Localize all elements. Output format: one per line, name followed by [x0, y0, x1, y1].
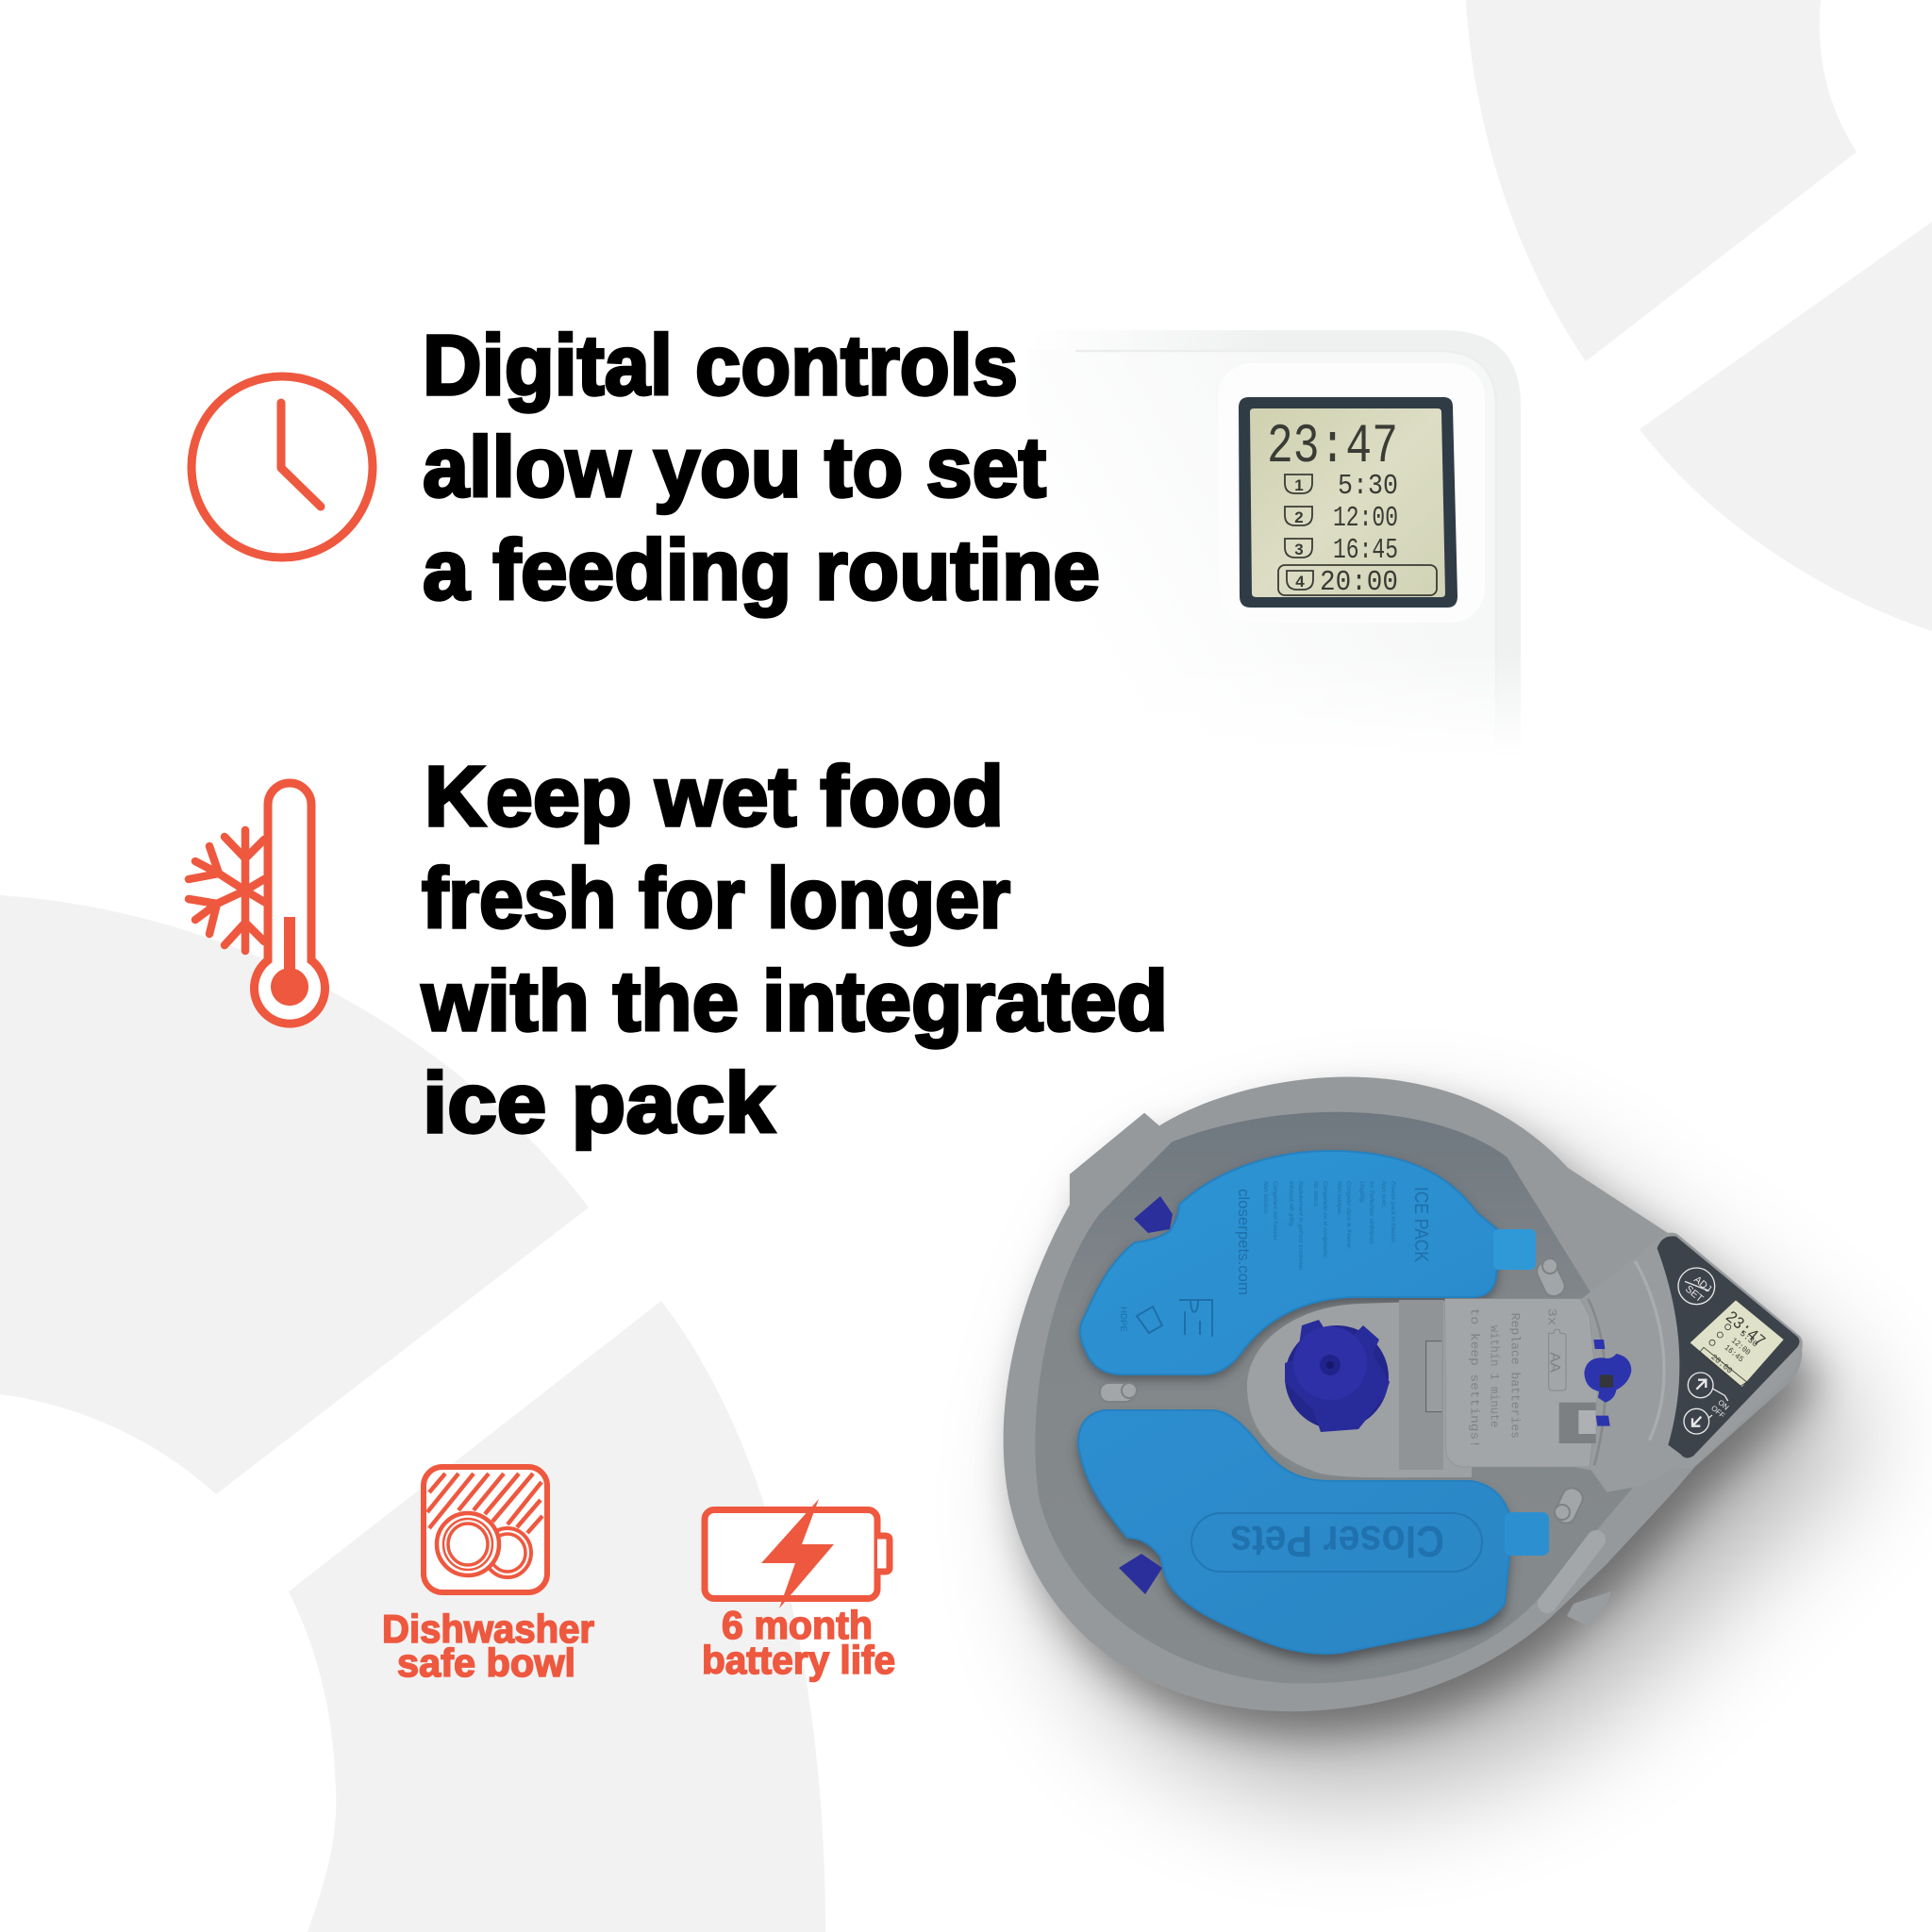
ice pack top: HDPE — [1119, 1307, 1128, 1332]
ice pack top: Congelado en el congelador. — [1322, 1181, 1328, 1259]
label: battery life — [702, 1603, 895, 1682]
label: battery life: battery life — [702, 1638, 895, 1682]
ice pack top: Congelare nel freezer. — [1272, 1181, 1278, 1241]
control panel: SET — [1683, 1283, 1706, 1305]
ice pack top: Nedokument in gefrost trockener. — [1297, 1181, 1304, 1272]
ice pack top: ICE PACK — [1410, 1187, 1431, 1263]
ice pack top: No tóxico. — [1312, 1181, 1319, 1208]
icon: dishwasher — [424, 1467, 547, 1592]
heading: keep wet food: ice pack — [423, 1057, 775, 1151]
indigo clips — [1119, 1196, 1173, 1594]
ice pack shadows — [1078, 1156, 1509, 1661]
LCD display: 4 — [1295, 573, 1305, 591]
LCD display: 16:45 — [1333, 534, 1398, 567]
LCD display: 12:00 — [1333, 502, 1398, 535]
heading: keep wet food: Keep wet food — [425, 750, 1004, 844]
control panel: 5:30 — [1738, 1329, 1759, 1349]
ice pack bottom — [1078, 1410, 1549, 1654]
ice pack top: Ungiftig. — [1358, 1181, 1365, 1204]
LCD display: 20:00 — [1320, 566, 1398, 599]
label: dishwasher safe bowl: safe bowl — [397, 1641, 575, 1685]
ice pack top — [1080, 1151, 1536, 1374]
faded feeder top — [1028, 330, 1528, 757]
ice pack top: Congeler dans le freezer. — [1345, 1181, 1352, 1250]
ice pack top: Non toxique. — [1336, 1181, 1342, 1216]
console and battery door: within 1 minute — [1487, 1325, 1501, 1427]
control panel: ADJ — [1691, 1274, 1713, 1295]
control panel: 12:00 — [1729, 1336, 1752, 1357]
console and battery door — [1426, 1233, 1803, 1492]
heading: keep wet food: fresh for longer — [422, 852, 1010, 946]
ice pack top: closerpets.com — [1235, 1189, 1253, 1295]
side latch — [1547, 1540, 1611, 1627]
feeder body — [1004, 1076, 1802, 1711]
LCD display: 5:30 — [1338, 470, 1398, 503]
console and battery door: Replace batteries — [1507, 1313, 1522, 1439]
hub — [1247, 1300, 1472, 1477]
soft shadow of ice pack feeder — [1018, 1100, 1858, 1787]
LCD display: 23:47 — [1267, 417, 1398, 478]
battery lock — [1584, 1340, 1631, 1426]
console and battery door: 3x — [1544, 1308, 1558, 1325]
label: dishwasher safe bowl — [382, 1607, 594, 1685]
control panel: ON — [1716, 1398, 1731, 1412]
LCD display: 1 — [1294, 476, 1304, 494]
heading: keep wet food — [421, 750, 1168, 1151]
label: battery life: 6 month — [722, 1603, 873, 1647]
ice pack top: Im Tiefkühler einfrieren. — [1368, 1181, 1374, 1245]
icon: battery — [705, 1499, 890, 1608]
heading: digital controls: allow you to set — [423, 421, 1046, 515]
control panel: 23:47 — [1721, 1308, 1768, 1352]
LCD display: 3 — [1294, 541, 1304, 558]
heading: keep wet food: with the integrated — [421, 955, 1168, 1049]
control panel: 16:45 — [1723, 1343, 1745, 1364]
feeding knob — [1285, 1320, 1390, 1432]
control panel: 20:00 — [1708, 1353, 1734, 1375]
ice pack top: Non toxic. — [1380, 1181, 1387, 1208]
ice pack top: Infused nitt giftig. — [1288, 1181, 1294, 1227]
ice pack top: Freeze pack in freezer. — [1390, 1181, 1396, 1243]
label: dishwasher safe bowl: Dishwasher — [382, 1607, 594, 1651]
ice pack bottom: Closer Pets — [1230, 1517, 1444, 1566]
heading: digital controls — [423, 319, 1100, 618]
ice pack top: Non tossico. — [1262, 1181, 1269, 1215]
feeder base with ice packs — [1004, 1076, 1803, 1711]
console and battery door: to keep settings! — [1466, 1308, 1480, 1448]
control panel: OFF — [1709, 1404, 1726, 1420]
control panel — [1657, 1236, 1799, 1457]
heading: digital controls: Digital controls — [423, 319, 1018, 413]
LCD display — [1239, 397, 1457, 608]
icon: thermometer with snowflake — [189, 783, 325, 1024]
screw posts — [1100, 1258, 1586, 1526]
icon: clock — [192, 376, 373, 558]
heading: digital controls: a feeding routine — [423, 524, 1100, 618]
LCD display: 2 — [1294, 508, 1304, 526]
console and battery door: AA — [1545, 1352, 1562, 1374]
